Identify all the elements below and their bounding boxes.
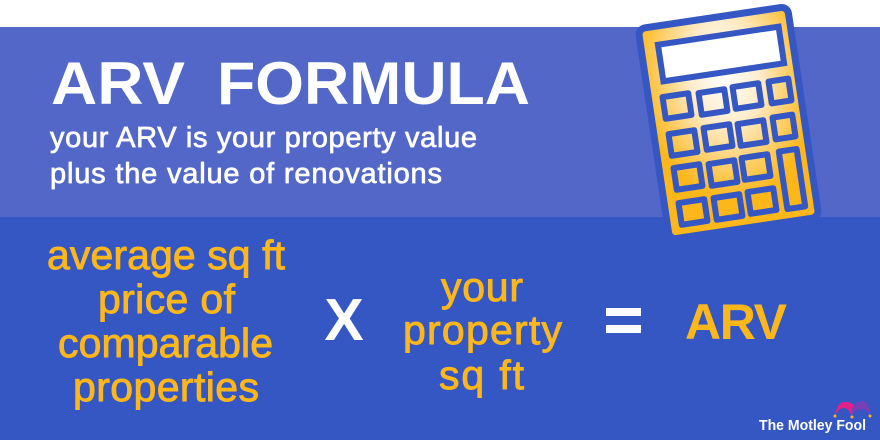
calculator display — [658, 27, 784, 81]
formula term: average price: average sq ft — [47, 232, 286, 278]
formula term: your property sq ft — [403, 264, 562, 398]
formula term: average price: properties — [73, 364, 259, 410]
formula term: average price: comparable — [58, 320, 273, 366]
formula term: your property sq ft: sq ft — [439, 352, 525, 398]
subtitle: plus the value of renovations — [50, 158, 442, 190]
multiply sign: X — [324, 287, 364, 353]
formula term: average price: price of — [98, 276, 236, 322]
panel: header band — [0, 27, 880, 217]
calculator keys — [663, 79, 805, 225]
subtitle — [50, 122, 477, 190]
formula term: your property sq ft: your — [441, 264, 523, 310]
calculator body — [638, 7, 819, 239]
logo: The Motley Fool — [759, 401, 872, 434]
panel: formula band — [0, 217, 880, 440]
title: FORMULA — [217, 50, 530, 117]
result: ARV: ARV — [685, 294, 788, 350]
formula term: average price — [47, 232, 286, 410]
equals sign — [606, 308, 641, 333]
logo wordmark: The Motley Fool — [759, 417, 866, 434]
icon: calculator — [638, 7, 819, 239]
icon: jester hat — [834, 401, 872, 418]
subtitle: your ARV is your property value — [50, 122, 477, 154]
formula term: your property sq ft: property — [403, 307, 562, 353]
title: ARV — [51, 50, 185, 117]
title — [51, 50, 530, 117]
